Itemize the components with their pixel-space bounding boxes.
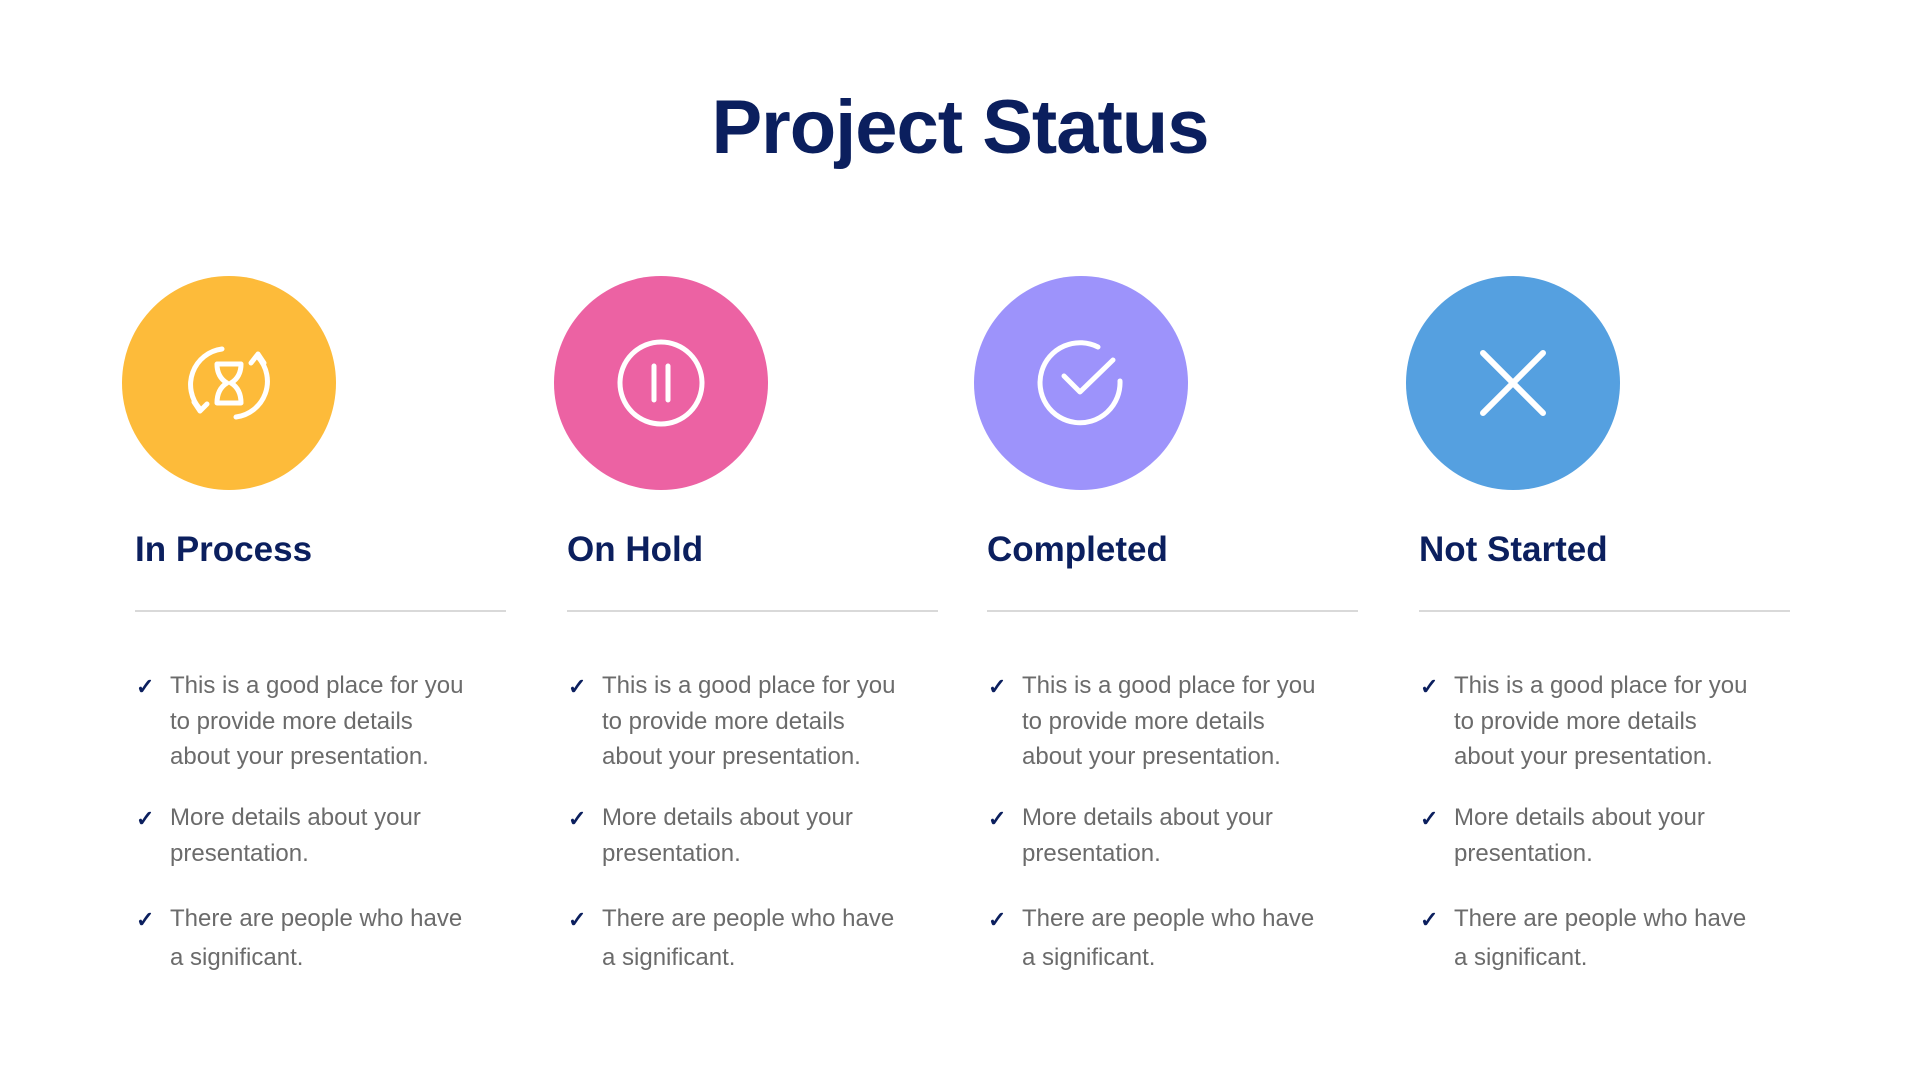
- panel: on hold: ✓: [568, 806, 586, 831]
- panel: not started: More details about your presentation.: [1454, 804, 1705, 866]
- heading: Not Started: [1419, 530, 1608, 569]
- icon: x: [1406, 276, 1620, 490]
- panel: completed: ✓: [988, 806, 1006, 831]
- panel: not started: There are people who have a significant.: [1454, 905, 1746, 971]
- panel: in process: ✓: [136, 674, 154, 699]
- panel: in process: This is a good place for you to provide more details about your presentation.: [170, 672, 464, 770]
- panel: in process: ✓: [136, 907, 154, 932]
- icon: hourglass refresh: [122, 276, 336, 490]
- panel: not started: ✓: [1420, 806, 1438, 831]
- panel: completed: This is a good place for you to provide more details about your presentation.: [1022, 672, 1316, 770]
- panel: on hold: [554, 276, 938, 971]
- bullets: [1420, 672, 1748, 770]
- panel: not started: [1406, 276, 1790, 971]
- panel: completed: More details about your presentation.: [1022, 804, 1273, 866]
- bullets: [568, 672, 896, 770]
- icon: check: [974, 276, 1188, 490]
- panel: on hold: This is a good place for you to provide more details about your presentation.: [602, 672, 896, 770]
- panel: not started: ✓: [1420, 674, 1438, 699]
- panel: in process: More details about your presentation.: [170, 804, 421, 866]
- panel: in process: There are people who have a significant.: [170, 905, 462, 971]
- panel: not started: This is a good place for you to provide more details about your presentation.: [1454, 672, 1748, 770]
- panel: in process: ✓: [136, 806, 154, 831]
- panel: on hold: ✓: [568, 907, 586, 932]
- panel: completed: ✓: [988, 907, 1006, 932]
- bullets: [988, 672, 1316, 770]
- panel: in process: [122, 276, 506, 971]
- title: Project Status: [711, 85, 1209, 170]
- panel: completed: There are people who have a significant.: [1022, 905, 1314, 971]
- panel: on hold: More details about your presentation.: [602, 804, 853, 866]
- panel: on hold: ✓: [568, 674, 586, 699]
- panel: not started: ✓: [1420, 907, 1438, 932]
- panel: completed: [974, 276, 1358, 971]
- icon: pause: [554, 276, 768, 490]
- panel: completed: ✓: [988, 674, 1006, 699]
- bullets: [136, 672, 464, 770]
- heading: On Hold: [567, 530, 703, 569]
- heading: Completed: [987, 530, 1168, 569]
- heading: In Process: [135, 530, 312, 569]
- panel: on hold: There are people who have a significant.: [602, 905, 894, 971]
